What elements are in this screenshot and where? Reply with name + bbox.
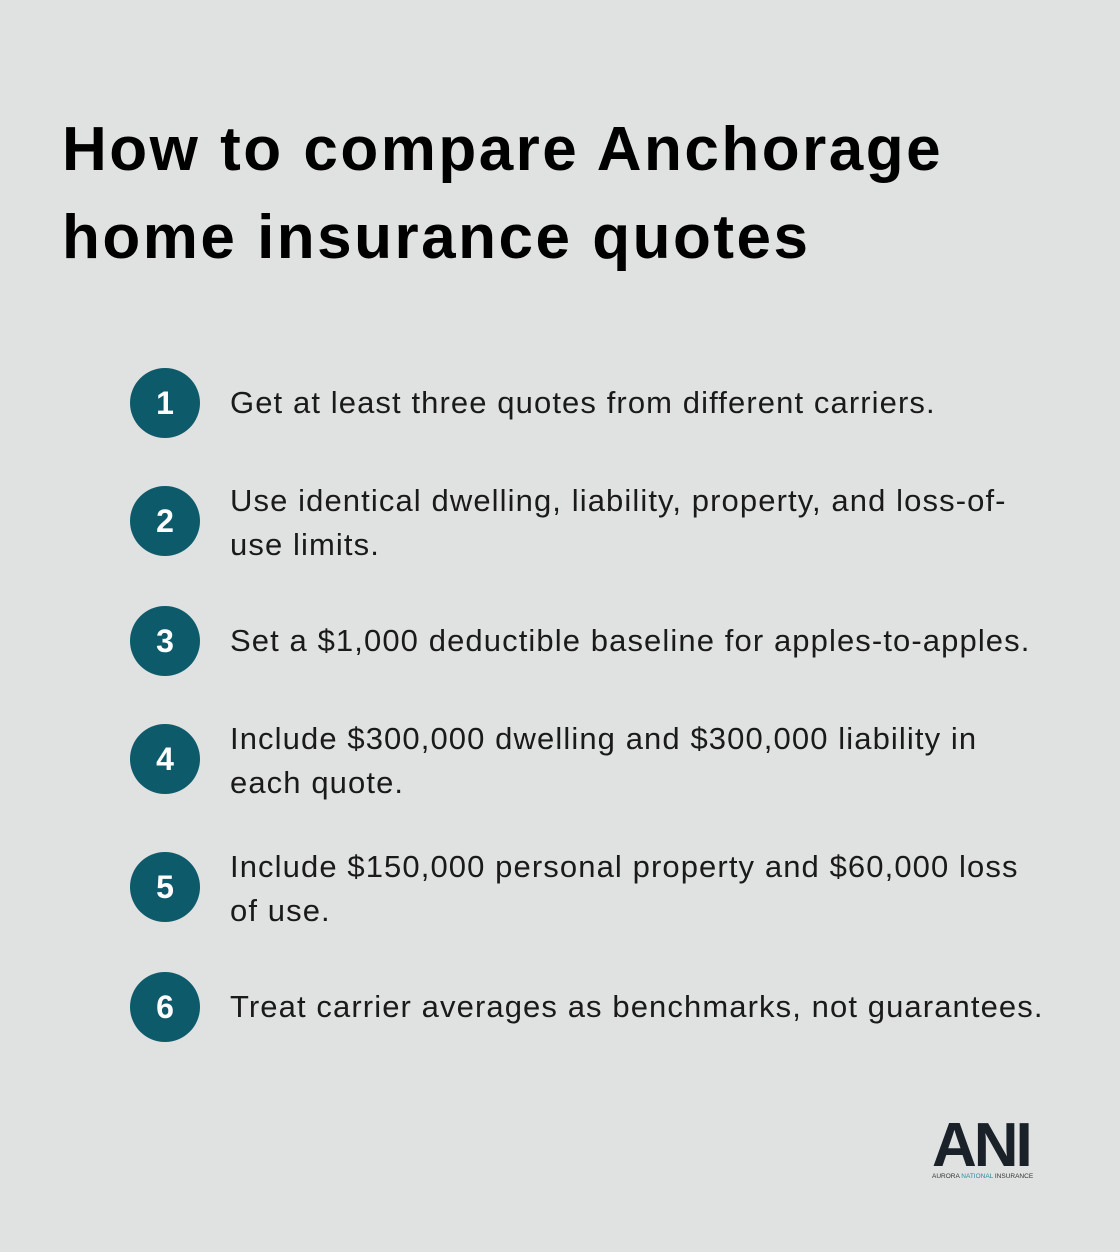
step 6: Treat carrier averages as benchmarks, not guarantees. bbox=[230, 989, 1044, 1024]
title bbox=[62, 115, 943, 272]
step 2: Use identical dwelling, liability, property, and loss-of- bbox=[230, 483, 1007, 518]
title: How to compare Anchorage bbox=[62, 115, 943, 184]
step 6: 6 bbox=[156, 989, 174, 1025]
step 3 bbox=[130, 606, 1030, 676]
step 4: each quote. bbox=[230, 765, 404, 800]
step 4: Include $300,000 dwelling and $300,000 liability in bbox=[230, 721, 977, 756]
step 1: Get at least three quotes from different carriers. bbox=[230, 385, 936, 420]
step 4 bbox=[130, 721, 977, 800]
title: home insurance quotes bbox=[62, 203, 810, 272]
step 3: Set a $1,000 deductible baseline for apples-to-apples. bbox=[230, 623, 1030, 658]
step 6 bbox=[130, 972, 1044, 1042]
step 5: 5 bbox=[156, 869, 174, 905]
logo: ANI bbox=[932, 1111, 1030, 1180]
step 1: 1 bbox=[156, 385, 174, 421]
step 5: of use. bbox=[230, 893, 331, 928]
step 2: use limits. bbox=[230, 527, 380, 562]
logo: AURORA NATIONAL INSURANCE bbox=[932, 1173, 1033, 1180]
step 2: 2 bbox=[156, 503, 174, 539]
step 1 bbox=[130, 368, 936, 438]
step 2 bbox=[130, 483, 1007, 562]
step 5: Include $150,000 personal property and $60,000 loss bbox=[230, 849, 1019, 884]
step 4: 4 bbox=[156, 741, 174, 777]
step 3: 3 bbox=[156, 623, 174, 659]
step 5 bbox=[130, 849, 1019, 928]
